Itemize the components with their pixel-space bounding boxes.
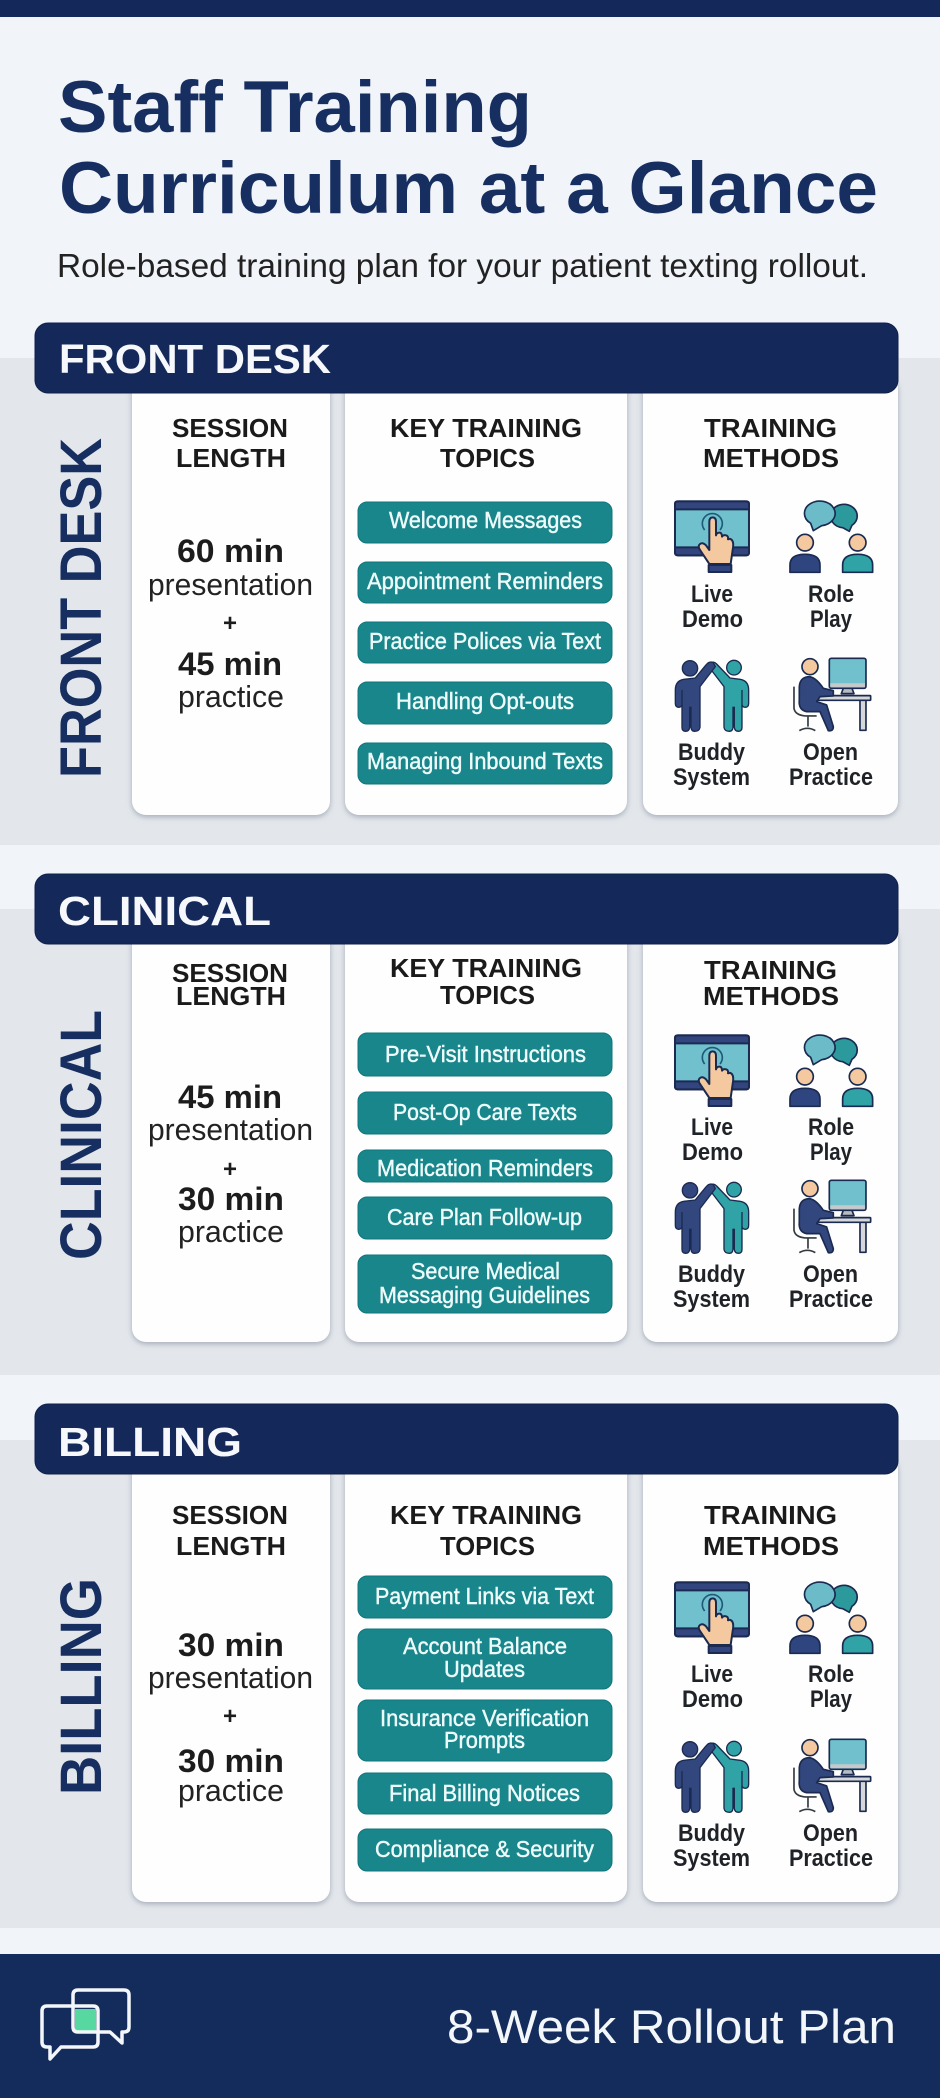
panel: session length	[132, 1455, 330, 1902]
panel: key training topics: Practice Polices via Text	[369, 628, 602, 654]
panel: key training topics: TOPICS	[440, 1531, 535, 1561]
icon: buddy system	[675, 1182, 749, 1253]
panel: key training topics: KEY TRAINING	[390, 413, 582, 443]
panel: training methods: Demo	[682, 606, 743, 633]
panel: training methods: Live	[691, 1661, 733, 1688]
panel: training methods: Live	[691, 1114, 733, 1141]
panel: session length: 60 min	[177, 533, 284, 569]
panel: session length: +	[223, 1703, 237, 1730]
panel: training methods: TRAINING	[704, 955, 837, 985]
vertical label: billing: BILLING	[49, 1578, 114, 1795]
panel: key training topics: Final Billing Notices	[389, 1780, 580, 1806]
panel: training methods: Practice	[789, 764, 873, 791]
section: clinical	[0, 874, 940, 1375]
section: front desk	[0, 323, 940, 845]
icon: open practice	[794, 1739, 871, 1812]
panel: training methods: Buddy	[678, 739, 746, 766]
panel: training methods: Play	[810, 1686, 853, 1713]
panel: session length: +	[223, 1156, 237, 1183]
panel: session length: practice	[178, 1773, 284, 1808]
icon: role play	[790, 1582, 873, 1653]
icon: open practice	[794, 658, 871, 731]
panel: training methods	[643, 1455, 898, 1902]
panel: session length: practice	[178, 679, 284, 714]
panel: training methods: Open	[803, 1820, 858, 1847]
panel: session length: practice	[178, 1214, 284, 1249]
top bar	[0, 0, 940, 17]
panel: key training topics	[345, 375, 627, 815]
panel: key training topics: Messaging Guidelines	[379, 1282, 590, 1308]
title: Curriculum at a Glance	[59, 148, 878, 229]
panel: session length: LENGTH	[176, 1531, 286, 1561]
footer text: 8-Week Rollout Plan	[447, 2000, 896, 2053]
panel: training methods	[643, 375, 898, 815]
panel: training methods: Buddy	[678, 1820, 746, 1847]
panel: training methods: Play	[810, 606, 853, 633]
section header: billing: BILLING	[58, 1419, 242, 1465]
section header: clinical: CLINICAL	[58, 888, 271, 934]
panel: training methods	[643, 925, 898, 1342]
icon: live demo	[675, 1035, 749, 1106]
icon: buddy system	[675, 660, 749, 731]
panel: session length: presentation	[148, 1660, 313, 1695]
panel: training methods: METHODS	[703, 981, 839, 1011]
panel: key training topics: KEY TRAINING	[390, 953, 582, 983]
panel: session length: presentation	[148, 1112, 313, 1147]
icon: role play	[790, 1035, 873, 1106]
title: Staff Training	[58, 67, 532, 148]
panel: key training topics	[345, 925, 627, 1342]
panel: training methods: Role	[808, 1114, 854, 1141]
panel: training methods: Live	[691, 581, 733, 608]
panel: session length: LENGTH	[176, 443, 286, 473]
panel: training methods: Open	[803, 1261, 858, 1288]
panel: key training topics: Updates	[444, 1656, 525, 1682]
section header: front desk	[35, 323, 898, 393]
panel: session length: SESSION	[172, 958, 288, 988]
panel: session length: SESSION	[172, 413, 288, 443]
icon: role play	[790, 501, 873, 572]
panel: training methods: System	[673, 1286, 750, 1313]
panel: key training topics: Post-Op Care Texts	[393, 1099, 577, 1125]
panel: session length: +	[223, 610, 237, 637]
panel: training methods: Role	[808, 581, 854, 608]
vertical label: clinical: CLINICAL	[49, 1010, 114, 1260]
panel: training methods: Practice	[789, 1845, 873, 1872]
vertical label: front desk: FRONT DESK	[49, 438, 114, 778]
panel: key training topics: Appointment Reminders	[367, 568, 603, 594]
panel: key training topics: Insurance Verification	[380, 1705, 589, 1731]
panel: training methods: Demo	[682, 1686, 743, 1713]
panel: session length	[132, 925, 330, 1342]
panel: training methods: Role	[808, 1661, 854, 1688]
panel: training methods: Buddy	[678, 1261, 746, 1288]
icon: buddy system	[675, 1741, 749, 1812]
section header: billing	[35, 1404, 898, 1474]
footer	[0, 1954, 940, 2098]
panel: training methods: METHODS	[703, 1531, 839, 1561]
panel: key training topics	[345, 1455, 627, 1902]
panel: key training topics: Payment Links via Text	[375, 1583, 595, 1609]
panel: training methods: Play	[810, 1139, 853, 1166]
section header: clinical	[35, 874, 898, 944]
panel: session length: 45 min	[178, 646, 282, 682]
section: billing	[0, 1404, 940, 1928]
panel: key training topics: Handling Opt-outs	[396, 688, 574, 714]
panel: training methods: Open	[803, 739, 858, 766]
panel: session length: presentation	[148, 567, 313, 602]
panel: training methods: TRAINING	[704, 1500, 837, 1530]
panel: key training topics: Welcome Messages	[389, 507, 582, 533]
panel: key training topics: Secure Medical	[411, 1258, 560, 1284]
panel: training methods: Practice	[789, 1286, 873, 1313]
icon: live demo	[675, 501, 749, 572]
panel: session length: LENGTH	[176, 981, 286, 1011]
panel: training methods: System	[673, 1845, 750, 1872]
panel: key training topics: Compliance & Security	[375, 1836, 594, 1862]
icon: chat bubbles	[42, 1990, 129, 2059]
panel: session length	[132, 375, 330, 815]
title	[58, 67, 878, 229]
panel: key training topics: Care Plan Follow-up	[387, 1204, 582, 1230]
panel: session length: 30 min	[178, 1627, 284, 1663]
panel: key training topics: Account Balance	[403, 1633, 567, 1659]
panel: key training topics: KEY TRAINING	[390, 1500, 582, 1530]
panel: training methods: TRAINING	[704, 413, 837, 443]
panel: key training topics: Managing Inbound Texts	[367, 748, 603, 774]
panel: session length: SESSION	[172, 1500, 288, 1530]
subtitle: Role-based training plan for your patient texting rollout.	[57, 247, 868, 284]
panel: training methods: System	[673, 764, 750, 791]
panel: key training topics: TOPICS	[440, 443, 535, 473]
icon: live demo	[675, 1582, 749, 1653]
icon: open practice	[794, 1180, 871, 1253]
panel: session length: 45 min	[178, 1079, 282, 1115]
panel: session length: 30 min	[178, 1181, 284, 1217]
panel: training methods: Demo	[682, 1139, 743, 1166]
section header: front desk: FRONT DESK	[59, 336, 331, 382]
panel: key training topics: Prompts	[444, 1727, 525, 1753]
panel: key training topics: Pre-Visit Instructions	[385, 1041, 586, 1067]
panel: training methods: METHODS	[703, 443, 839, 473]
panel: session length: 30 min	[178, 1743, 284, 1779]
panel: key training topics: TOPICS	[440, 980, 535, 1010]
panel: key training topics: Medication Reminders	[377, 1155, 593, 1181]
